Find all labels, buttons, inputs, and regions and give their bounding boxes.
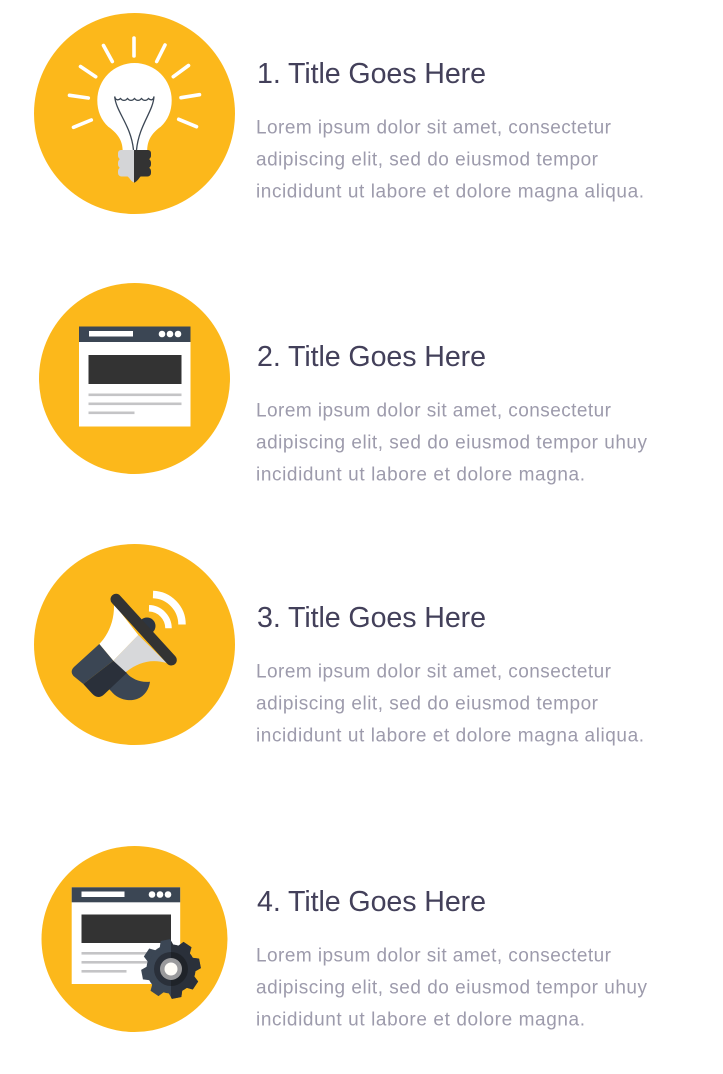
text block: item 4: Lorem ipsum dolor sit amet, consectetur xyxy=(256,946,612,967)
text block: item 2: incididunt ut labore et dolore magna. xyxy=(256,465,585,486)
panel: item 1 xyxy=(34,13,644,214)
text block: item 1: adipiscing elit, sed do eiusmod tempor xyxy=(256,150,599,171)
icon: browser window with gear xyxy=(42,846,228,1032)
text block: item 1: Lorem ipsum dolor sit amet, consectetur xyxy=(256,118,612,139)
text block: item 3: incididunt ut labore et dolore magna aliqua. xyxy=(256,726,644,747)
text block: item 2 xyxy=(256,401,648,486)
heading: item 1: 1. Title Goes Here xyxy=(257,58,486,90)
text block: item 1 xyxy=(256,118,644,203)
icon: light bulb xyxy=(34,13,235,214)
text block: item 4: incididunt ut labore et dolore magna. xyxy=(256,1010,585,1031)
panel: item 4 xyxy=(42,846,648,1032)
icon: megaphone xyxy=(34,544,235,745)
text block: item 2: Lorem ipsum dolor sit amet, consectetur xyxy=(256,401,612,422)
text block: item 2: adipiscing elit, sed do eiusmod tempor uhuy xyxy=(256,433,648,454)
panel: item 2 xyxy=(39,283,648,486)
icon: browser window xyxy=(39,283,230,474)
text block: item 3 xyxy=(256,662,644,747)
heading: item 4: 4. Title Goes Here xyxy=(257,886,486,918)
text block: item 4 xyxy=(256,946,648,1031)
text block: item 1: incididunt ut labore et dolore magna aliqua. xyxy=(256,182,644,203)
text block: item 3: adipiscing elit, sed do eiusmod tempor xyxy=(256,694,599,715)
text block: item 4: adipiscing elit, sed do eiusmod tempor uhuy xyxy=(256,978,648,999)
panel: item 3 xyxy=(34,544,644,747)
heading: item 2: 2. Title Goes Here xyxy=(257,341,486,373)
text block: item 3: Lorem ipsum dolor sit amet, consectetur xyxy=(256,662,612,683)
heading: item 3: 3. Title Goes Here xyxy=(257,602,486,634)
